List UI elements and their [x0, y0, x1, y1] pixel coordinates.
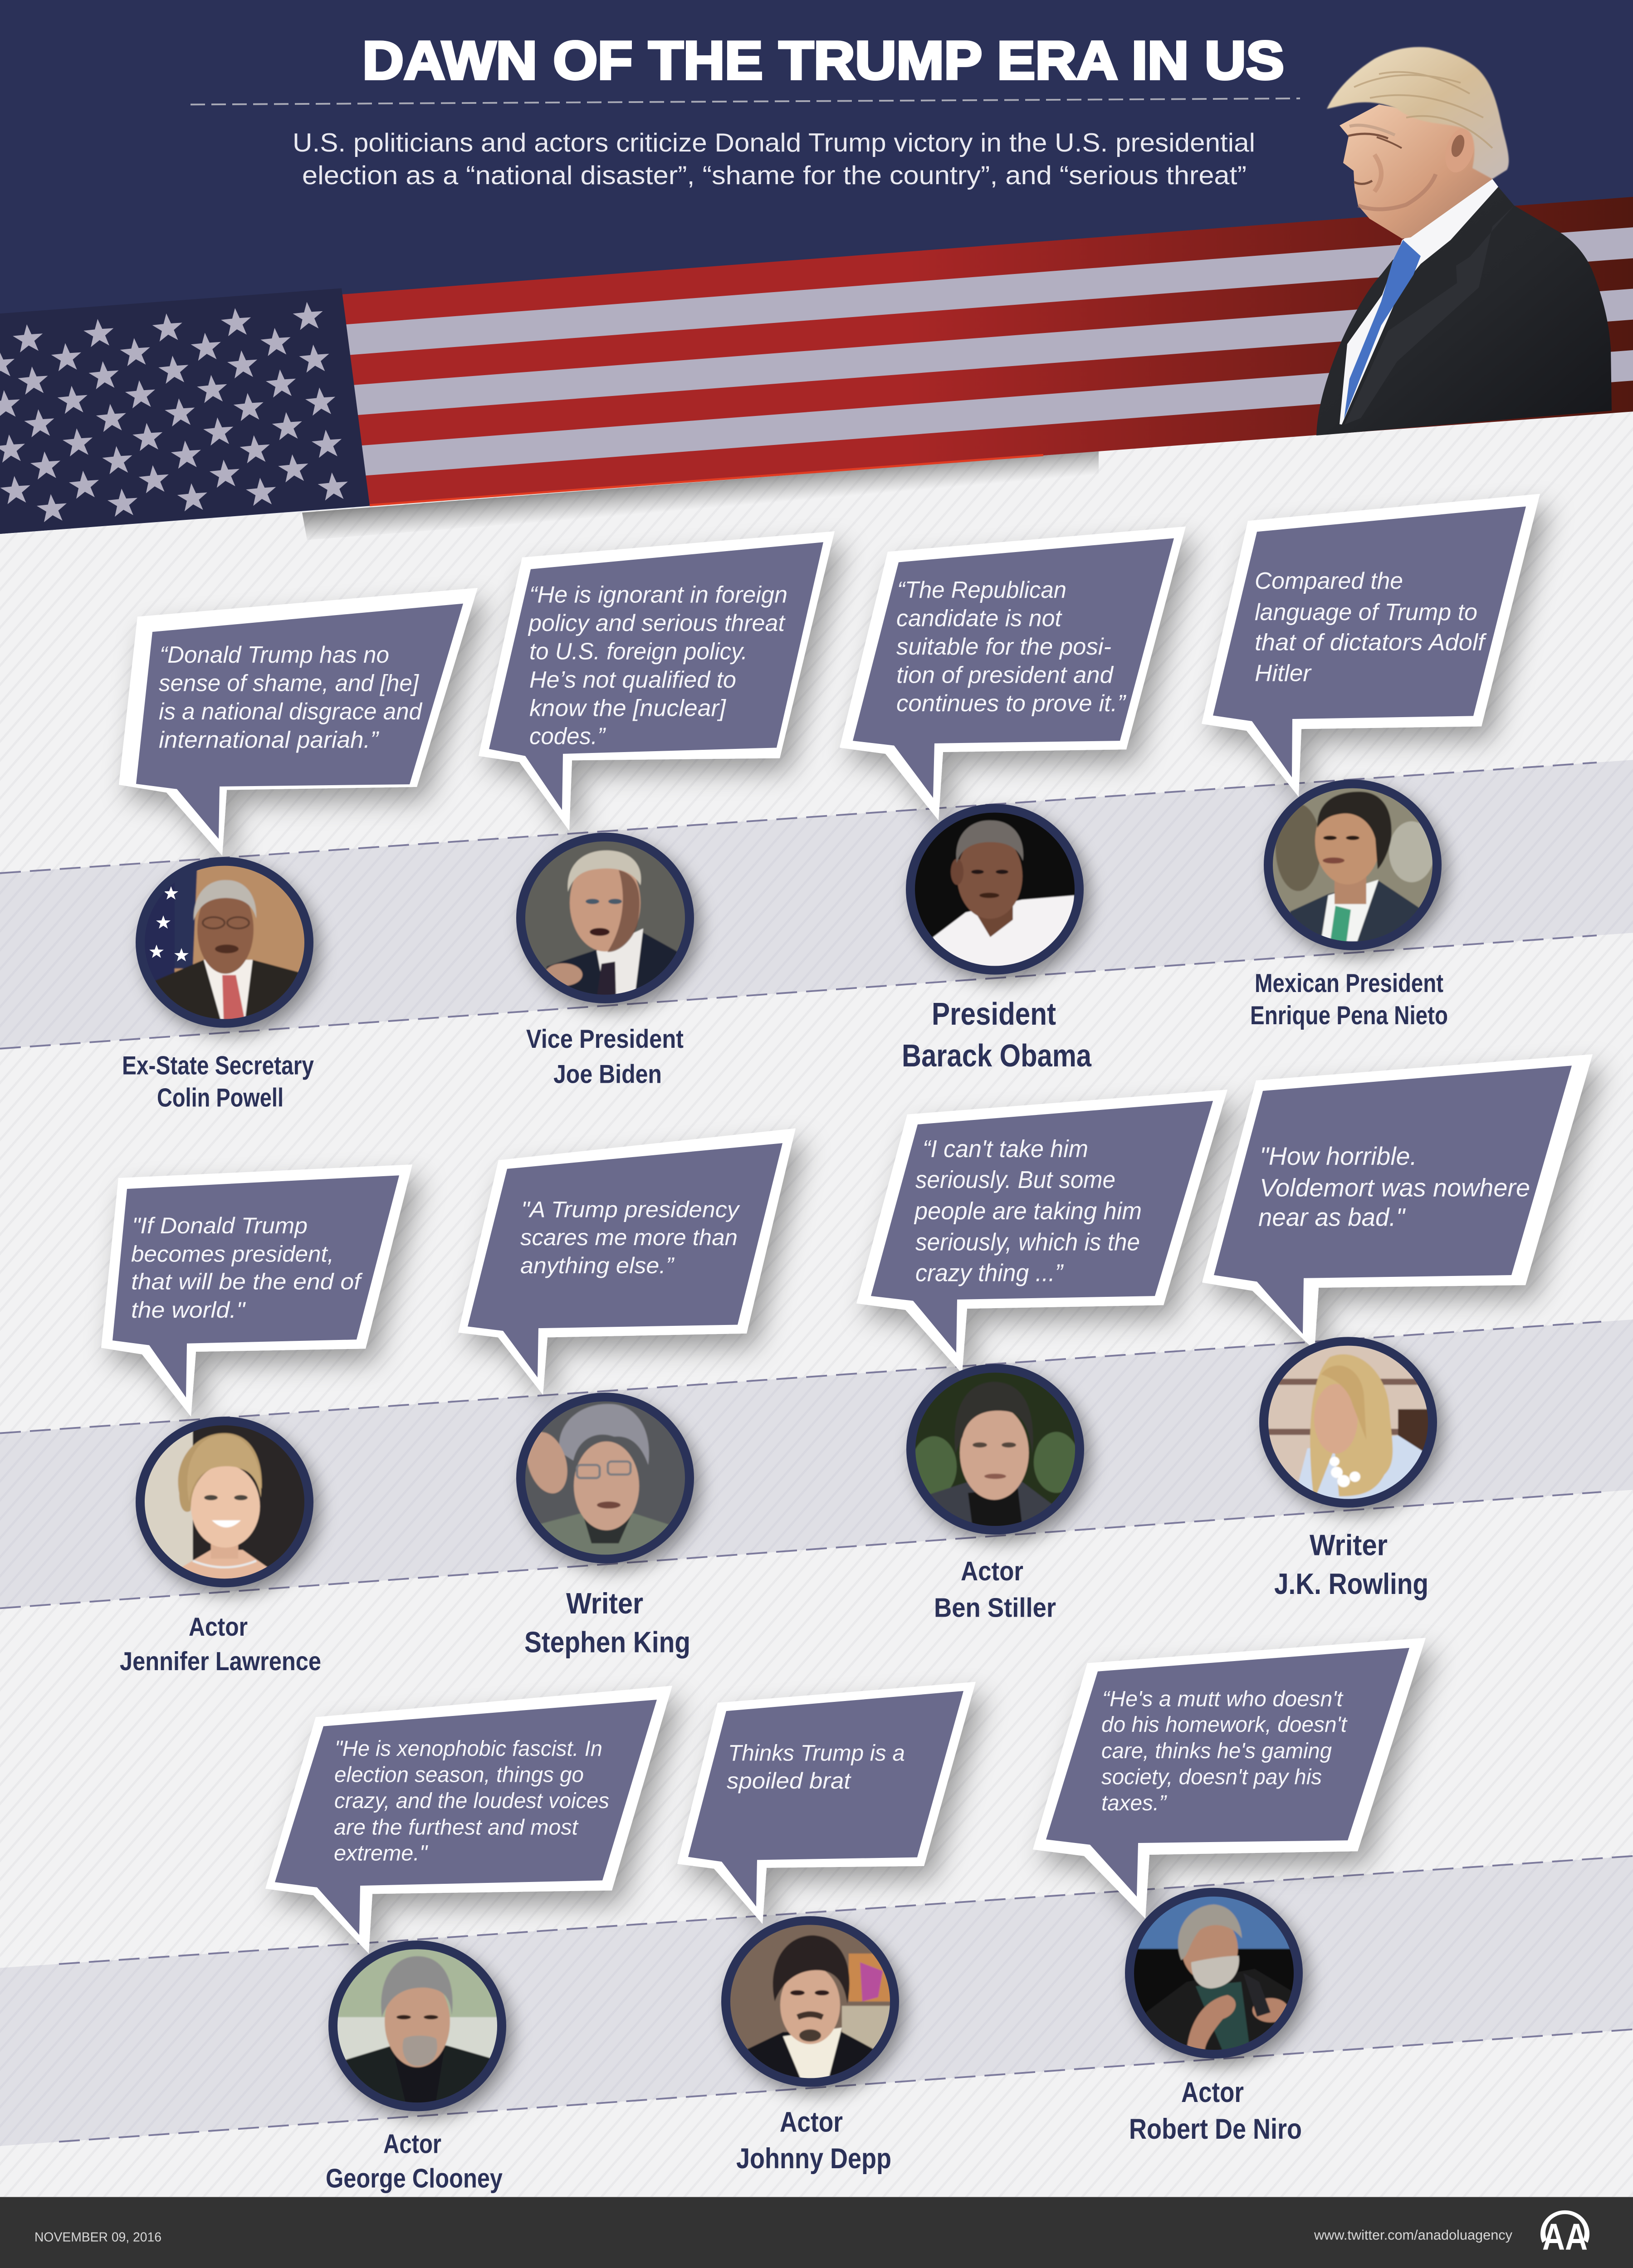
quote text: “Donald Trump has no [160, 642, 389, 668]
quote text: "He is xenophobic fascist. In [335, 1737, 602, 1761]
speech bubble [1202, 494, 1540, 797]
quote text [727, 1740, 905, 1794]
name: Actor [383, 2129, 441, 2159]
band: row 1 [0, 760, 1633, 1049]
trump tie [1344, 240, 1421, 419]
name: Writer [566, 1587, 643, 1620]
portrait [136, 857, 313, 1028]
trump facial features [1348, 125, 1436, 209]
name: Vice President [526, 1025, 684, 1054]
name: Robert De Niro [1129, 2112, 1302, 2145]
quote text: that will be the end of [131, 1269, 363, 1295]
name: Colin Powell [157, 1084, 284, 1112]
name: Stephen King [524, 1626, 690, 1659]
subtitle: U.S. politicians and actors criticize Donald Trump victory in the U.S. presidential [293, 128, 1255, 157]
name: Writer [1310, 1529, 1388, 1562]
quote text: scares me more than [520, 1225, 738, 1250]
quote text: policy and serious threat [528, 610, 786, 636]
quote: Jennifer Lawrence [101, 1164, 412, 1676]
name [1250, 969, 1448, 1030]
name [902, 996, 1092, 1073]
subtitle: election as a “national disaster”, “shame for the country”, and “serious threat” [302, 161, 1247, 190]
portrait [1125, 1888, 1303, 2058]
quote text: people are taking him [914, 1197, 1142, 1225]
name: Barack Obama [902, 1038, 1092, 1073]
footer date: NOVEMBER 09, 2016 [34, 2230, 161, 2244]
quote: Enrique Pena Nieto [1202, 494, 1540, 1030]
quote: Joe Biden [479, 531, 835, 1089]
title: DAWN OF THE TRUMP ERA IN US [362, 30, 1284, 90]
name [1129, 2076, 1302, 2145]
quote text: “He is ignorant in foreign [529, 582, 787, 608]
name: Actor [189, 1613, 248, 1642]
name: Mexican President [1255, 969, 1443, 998]
name: George Clooney [326, 2163, 503, 2193]
quote text: “The Republican [897, 577, 1066, 603]
name: Ben Stiller [934, 1593, 1056, 1623]
footer [0, 2197, 1633, 2268]
quote text: He’s not qualified to [529, 667, 736, 693]
name [326, 2129, 503, 2193]
quote text [131, 1213, 363, 1323]
portrait [328, 1941, 506, 2111]
quote: Stephen King [458, 1129, 796, 1659]
speech bubble [265, 1686, 672, 1954]
quote text: seriously, which is the [915, 1228, 1140, 1256]
quote text: know the [nuclear] [529, 695, 726, 721]
band: row 3 [0, 1856, 1633, 2146]
quote text [1258, 1143, 1530, 1232]
quote text [1255, 568, 1487, 686]
speech bubble [458, 1129, 796, 1395]
name: J.K. Rowling [1274, 1568, 1428, 1601]
american flag [0, 197, 1633, 534]
trump hair [1327, 47, 1509, 179]
name [120, 1613, 321, 1676]
quote text: Compared the [1255, 568, 1403, 594]
quote text [1101, 1687, 1348, 1815]
name: Joe Biden [553, 1060, 662, 1089]
quote: Robert De Niro [1033, 1638, 1426, 2145]
quote text: society, doesn't pay his [1101, 1765, 1322, 1789]
portrait [1259, 1337, 1437, 1508]
quote text: sense of shame, and [he] [159, 670, 419, 696]
quote text [520, 1197, 741, 1278]
name: Actor [961, 1556, 1023, 1586]
portrait [721, 1916, 899, 2087]
name: Actor [780, 2106, 843, 2138]
quote text: crazy thing ...” [915, 1259, 1064, 1286]
speech bubble [1202, 1054, 1593, 1350]
quote text: Voldemort was nowhere [1260, 1174, 1530, 1202]
quote text: “He's a mutt who doesn't [1102, 1687, 1344, 1711]
quote text: seriously. But some [915, 1166, 1115, 1193]
portrait [1264, 780, 1442, 950]
quote text: codes.” [529, 723, 606, 749]
quote text: election season, things go [334, 1763, 584, 1787]
name: President [932, 996, 1056, 1031]
icon: anadolu agency logo: AA [1542, 2216, 1588, 2258]
quote text: language of Trump to [1255, 599, 1477, 626]
quote text: that of dictators Adolf [1255, 629, 1487, 655]
quote text: to U.S. foreign policy. [529, 639, 748, 665]
name: Ex-State Secretary [122, 1051, 314, 1080]
quote text: taxes.” [1101, 1791, 1168, 1815]
quote text: spoiled brat [727, 1768, 851, 1794]
quote text: "A Trump presidency [521, 1197, 741, 1222]
name [736, 2106, 891, 2175]
quote text: "How horrible. [1260, 1143, 1417, 1171]
portrait: Donald Trump [1316, 47, 1612, 435]
quote text: extreme." [334, 1841, 429, 1865]
quote text: anything else.” [520, 1253, 675, 1278]
quote text: Thinks Trump is a [728, 1740, 905, 1765]
quote text: care, thinks he's gaming [1101, 1739, 1332, 1763]
speech bubble [479, 531, 835, 831]
quote: J.K. Rowling [1202, 1054, 1593, 1601]
speech bubble [856, 1090, 1227, 1374]
band: row 2 [0, 1320, 1633, 1608]
quote text [914, 1135, 1142, 1286]
quote text: Hitler [1255, 660, 1312, 686]
portrait [136, 1417, 313, 1587]
header background [0, 0, 1633, 566]
speech bubble [840, 527, 1186, 821]
name [122, 1051, 314, 1112]
quote: Barack Obama [840, 527, 1186, 1073]
portrait [906, 1364, 1084, 1535]
trump lapel [1345, 205, 1514, 425]
trump shirt [1340, 179, 1498, 425]
quote text: becomes president, [131, 1241, 334, 1266]
subtitle [293, 128, 1255, 190]
title divider [191, 98, 1300, 104]
trump neck and face [1340, 104, 1492, 239]
flag canton with stars [0, 288, 370, 534]
quote text: do his homework, doesn't [1101, 1713, 1348, 1737]
speech bubble [101, 1164, 412, 1417]
portrait [906, 804, 1084, 975]
speech bubble [677, 1682, 976, 1924]
quote: Johnny Depp [677, 1682, 976, 2175]
quote text: are the furthest and most [334, 1816, 579, 1840]
quote text [159, 642, 423, 753]
quote: Colin Powell [119, 588, 478, 1112]
footer url: www.twitter.com/anadoluagency [1314, 2227, 1512, 2243]
quote text: crazy, and the loudest voices [334, 1789, 609, 1813]
quote text: the world." [131, 1297, 246, 1323]
name: Johnny Depp [736, 2142, 891, 2175]
portrait [516, 1393, 694, 1564]
quote: George Clooney [265, 1686, 672, 2193]
name [1274, 1529, 1428, 1601]
quote text: suitable for the posi- [896, 634, 1111, 660]
portrait [516, 833, 694, 1003]
name: Actor [1181, 2076, 1244, 2108]
quote text [896, 577, 1126, 717]
name: Jennifer Lawrence [120, 1647, 321, 1676]
name [934, 1556, 1056, 1623]
quote text [334, 1737, 609, 1865]
name [526, 1025, 684, 1089]
quote text: is a national disgrace and [159, 699, 423, 725]
content background [0, 411, 1633, 2221]
flag stripes [342, 197, 1633, 506]
speech bubble [119, 588, 478, 856]
quote text [528, 582, 787, 749]
flag shadow [302, 451, 1099, 540]
speech bubble [1033, 1638, 1426, 1919]
trump ear [1441, 125, 1479, 176]
quote: Ben Stiller [856, 1090, 1227, 1623]
quote text: near as bad." [1258, 1204, 1406, 1232]
quote text: “I can't take him [923, 1135, 1088, 1163]
trump suit [1316, 187, 1612, 435]
name [524, 1587, 690, 1659]
quote text: candidate is not [896, 606, 1062, 631]
quote text: continues to prove it.” [896, 690, 1126, 717]
quote text: tion of president and [896, 662, 1114, 688]
quote text: "If Donald Trump [132, 1213, 308, 1238]
name: Enrique Pena Nieto [1250, 1001, 1448, 1030]
quote text: international pariah.” [159, 727, 379, 753]
